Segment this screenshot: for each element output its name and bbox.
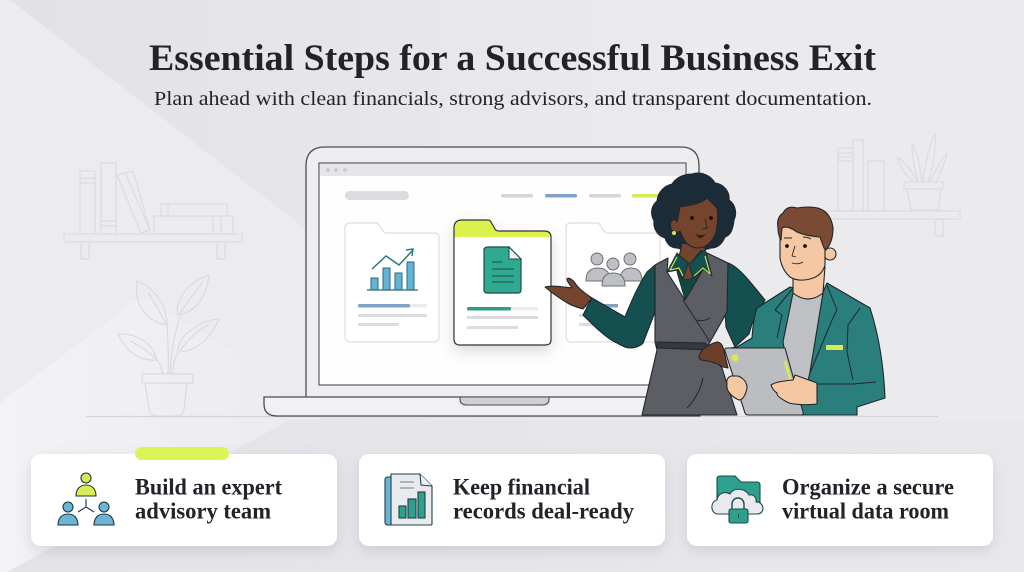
icon: advisory team [58, 473, 114, 525]
accent pill [135, 447, 229, 460]
tablet [725, 348, 803, 415]
card 2 text: records deal-ready [453, 498, 634, 524]
card 2 text: Keep financial [453, 474, 590, 500]
card 3 text: virtual data room [782, 498, 949, 524]
folder card: chart [345, 223, 439, 342]
subtitle: Plan ahead with clean financials, strong advisors, and transparent documentation. [154, 88, 872, 110]
illustration: man with tablet [725, 207, 885, 415]
card 2: financial records [359, 454, 665, 546]
man shirt [783, 293, 823, 390]
screen header bars [345, 191, 662, 200]
card 3 text [782, 474, 954, 524]
man pocket square [826, 345, 843, 350]
man jacket lapels and seams [775, 285, 876, 384]
title: Essential Steps for a Successful Business Exit [149, 38, 877, 79]
card 1: advisory team [31, 454, 337, 546]
laptop base [264, 397, 700, 416]
woman blouse [677, 250, 706, 300]
man left hand [727, 376, 747, 400]
folder card: team [566, 223, 660, 342]
laptop lid [306, 147, 699, 398]
floor line [86, 416, 938, 418]
man jacket [730, 283, 885, 415]
man right hand [771, 375, 817, 405]
folder card: document (highlighted) [454, 220, 551, 345]
icon: team [586, 253, 642, 286]
woman hair [652, 173, 736, 250]
woman pointing hand [545, 278, 592, 309]
right bookshelf and plant [826, 133, 960, 236]
icon: financial report [385, 474, 432, 525]
man neck [793, 267, 825, 299]
card 3: virtual data room [687, 454, 993, 546]
card 3 text: Organize a secure [782, 474, 954, 500]
icon: secure cloud folder [712, 476, 763, 523]
woman earring [672, 231, 676, 235]
laptop screen [319, 163, 686, 385]
woman sleeves [583, 263, 765, 348]
card 1 text: Build an expert [135, 474, 282, 500]
man hair [778, 207, 833, 250]
icon: growth chart [367, 249, 418, 290]
woman neck and face [670, 198, 718, 282]
left bookshelf [64, 163, 242, 259]
man head [780, 225, 825, 280]
woman hand on hip [699, 342, 728, 368]
laptop [264, 147, 700, 416]
woman dress [642, 253, 737, 415]
card 1 text [135, 474, 282, 524]
card 2 text [453, 474, 634, 524]
woman collar [667, 250, 712, 280]
card 1 text: advisory team [135, 498, 271, 524]
illustration: woman presenting [545, 173, 765, 415]
left plant [118, 275, 219, 416]
icon: document [484, 247, 521, 293]
man ear [824, 248, 836, 260]
